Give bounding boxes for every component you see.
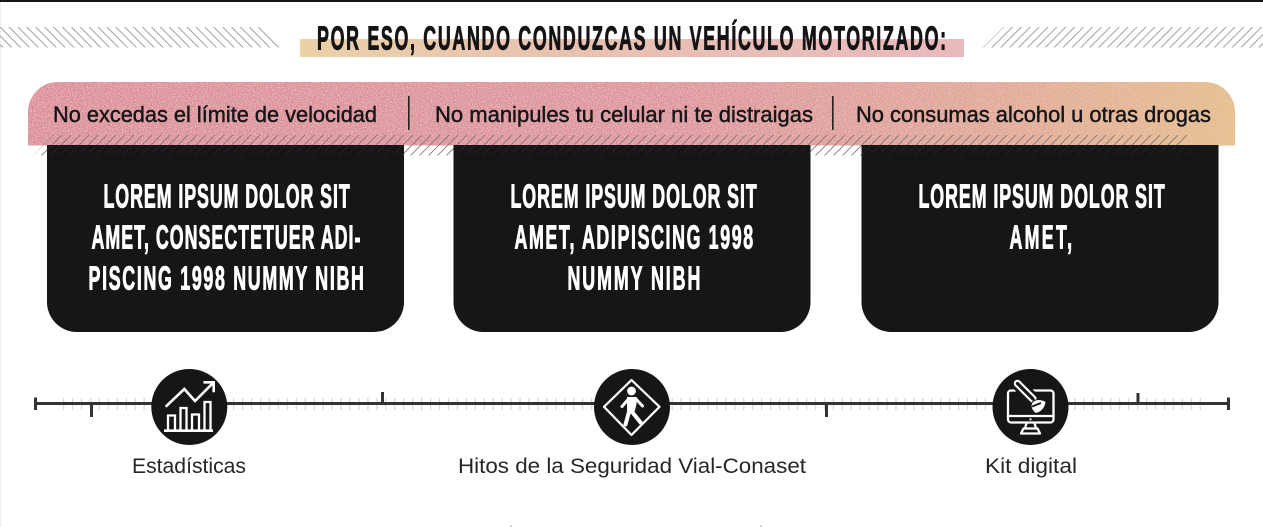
bottom crop marks (511, 525, 761, 527)
timeline minor ticks (63, 398, 1201, 410)
card 1 text (88, 178, 364, 297)
timeline marker up 1 (381, 392, 384, 404)
title text: POR ESO, CUANDO CONDUZCAS UN VEHÍCULO MOTORIZADO: (317, 20, 946, 57)
timeline axis (35, 402, 1229, 405)
band text: phone: No manipules tu celular ni te distraigas (435, 102, 813, 127)
icon: pedestrian sign (594, 369, 670, 445)
band divider 2 (832, 96, 834, 130)
card 2 hatch overlay (454, 145, 810, 156)
card 3 background (862, 145, 1218, 332)
right hatch decoration (983, 27, 1263, 48)
label: digital kit: Kit digital (985, 455, 1077, 478)
timeline (34, 392, 1230, 417)
timeline end cap right (1227, 398, 1230, 410)
card 3 text: LOREM IPSUM DOLOR SIT (918, 178, 1165, 215)
band text: alcohol: No consumas alcohol u otras drogas (856, 102, 1211, 127)
band divider 1 (408, 96, 410, 130)
title (300, 20, 964, 57)
timeline marker down 2 (825, 403, 828, 417)
card 1 hatch overlay (47, 145, 404, 156)
left edge line (0, 0, 1, 527)
band background (28, 82, 1235, 146)
card 1 background (47, 145, 404, 332)
panel: card 2 (454, 145, 810, 332)
panel: recommendations band (28, 82, 1235, 146)
band text: speed: No excedas el límite de velocidad (53, 102, 377, 127)
card 1 text: AMET, CONSECTETUER ADI- (92, 219, 360, 256)
left hatch decoration (0, 27, 284, 48)
label: statistics: Estadísticas (132, 455, 246, 478)
lower hatch decoration (33, 135, 1192, 156)
icon: digital kit (992, 369, 1068, 445)
top bar (0, 0, 1263, 2)
timeline end cap left (34, 398, 37, 410)
card 1 text: PISCING 1998 NUMMY NIBH (88, 260, 364, 297)
card 3 text (918, 178, 1165, 256)
panel: card 3 (862, 145, 1218, 332)
title highlight (300, 39, 964, 57)
panel: card 1 (47, 145, 404, 332)
card 2 text: NUMMY NIBH (568, 260, 700, 297)
label: road safety milestones: Hitos de la Seguridad Vial-Conaset (458, 455, 806, 478)
card 2 text (510, 178, 757, 297)
card 3 text: AMET, (1010, 219, 1072, 256)
card 2 text: AMET, ADIPISCING 1998 (514, 219, 753, 256)
card 2 background (454, 145, 810, 332)
card 2 text: LOREM IPSUM DOLOR SIT (510, 178, 757, 215)
card 3 hatch overlay (862, 145, 1192, 156)
icon: statistics chart (151, 369, 227, 445)
timeline marker up 2 (1136, 393, 1140, 404)
timeline marker down 1 (90, 403, 93, 417)
card 1 text: LOREM IPSUM DOLOR SIT (104, 178, 350, 215)
